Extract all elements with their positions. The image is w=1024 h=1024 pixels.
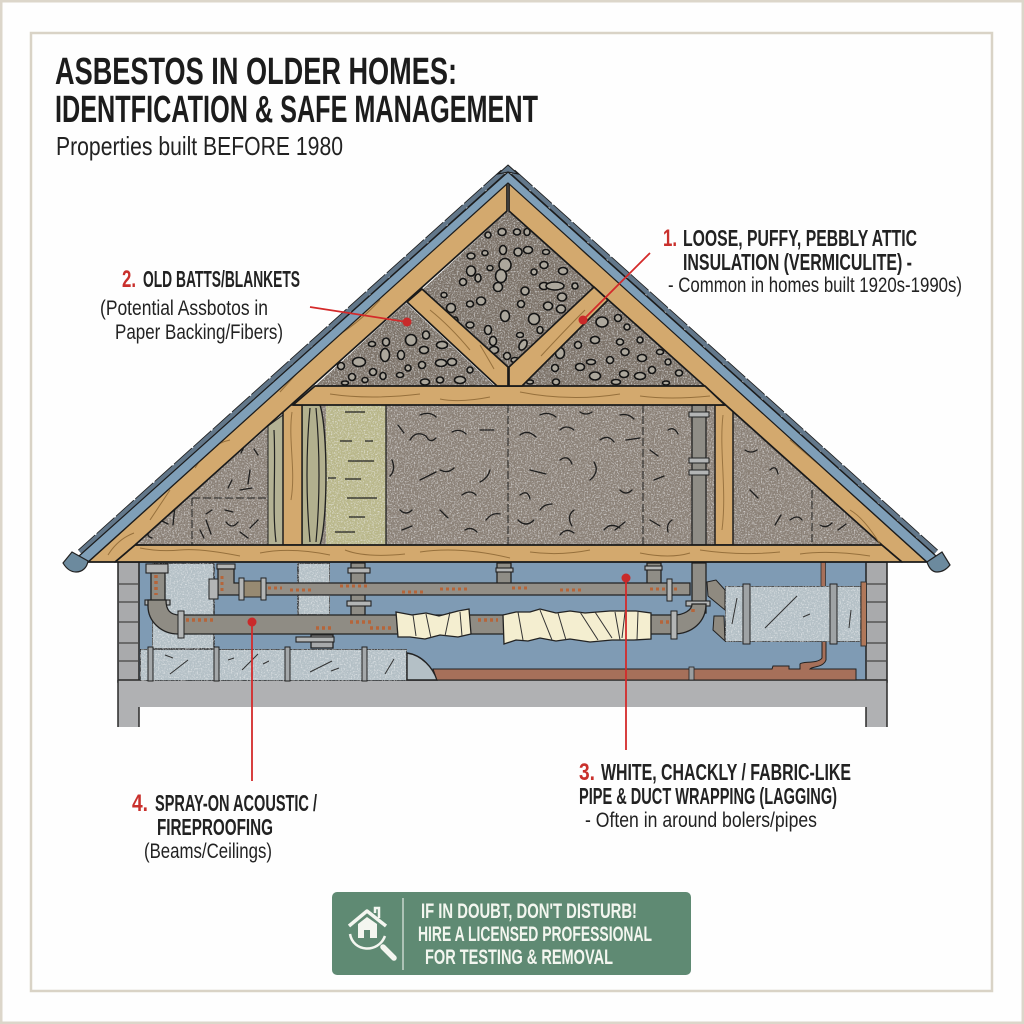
left wall [118, 562, 139, 682]
callout text 4: FIREPROOFING [157, 814, 273, 840]
right duct [707, 580, 866, 646]
callout text 4: 4. [132, 790, 148, 817]
callout leader 2 [310, 307, 412, 326]
truss frame [88, 183, 927, 562]
collar tie [293, 386, 725, 405]
callout text 2: OLD BATTS/BLANKETS [143, 266, 300, 292]
right brace [509, 287, 608, 386]
title [55, 51, 538, 131]
banner text: FOR TESTING & REMOVAL [425, 946, 613, 969]
wood grain [108, 225, 880, 558]
floor slab [118, 680, 887, 727]
attic insulation field [135, 405, 882, 545]
callout text 2: (Potential Assbotos in [100, 297, 268, 320]
callout text 1: LOOSE, PUFFY, PEBBLY ATTIC [683, 225, 917, 251]
right rafter [509, 183, 927, 562]
banner text: IF IN DOUBT, DON'T DISTURB! [421, 900, 637, 923]
callout text 3: WHITE, CHACKLY / FABRIC-LIKE [601, 759, 851, 785]
callout text 2 [100, 266, 300, 344]
lower rusty pipe with elbows [148, 575, 706, 639]
right wall [866, 562, 887, 682]
vertical pipe in attic [689, 405, 709, 545]
callout text 3: PIPE & DUCT WRAPPING (LAGGING) [579, 783, 837, 809]
callout text 3 [579, 759, 851, 832]
left rafter [88, 183, 507, 562]
title: IDENTFICATION & SAFE MANAGEMENT [55, 89, 538, 131]
callout text 3: 3. [579, 759, 595, 786]
roof shingles [79, 165, 936, 562]
warning banner [332, 892, 691, 975]
crawl space background [138, 562, 867, 682]
pipe lagging wrap B [503, 609, 651, 644]
callout text 3: - Often in around bolers/pipes [585, 809, 817, 832]
callout text 4: (Beams/Ceilings) [144, 840, 272, 863]
banner text [418, 900, 652, 969]
copper pipe along floor [433, 562, 856, 680]
vertical studs [283, 405, 733, 545]
left brace [407, 289, 508, 386]
vermiculite pebbles [338, 228, 682, 385]
banner text: HIRE A LICENSED PROFESSIONAL [418, 923, 652, 946]
sprayed block columns [152, 563, 330, 649]
callout text 1: 1. [663, 225, 677, 252]
callout leader 4 [248, 618, 256, 781]
vertical pipe stubs [151, 563, 706, 648]
callout text 4: SPRAY-ON ACOUSTIC / [155, 790, 317, 816]
lower duct run [140, 647, 437, 681]
subtitle: Properties built BEFORE 1980 [56, 131, 343, 161]
callout leader 1 [578, 253, 650, 324]
vermiculite fill: centre diamond [423, 211, 593, 367]
icon: house under magnifying glass [349, 908, 394, 958]
vermiculite fill: left triangle [315, 303, 495, 386]
house cross-section diagram [63, 165, 950, 727]
callout text 2: 2. [122, 266, 136, 293]
callout text 1: INSULATION (VERMICULITE) - [683, 249, 912, 275]
left gutter [63, 552, 88, 572]
callout text 2: Paper Backing/Fibers) [115, 321, 283, 344]
title: ASBESTOS IN OLDER HOMES: [55, 51, 457, 93]
callout leader 3 [622, 574, 630, 750]
callout text 4 [132, 790, 317, 863]
upper rusty pipe [209, 569, 690, 601]
insulation batt (old blanket) [268, 405, 386, 545]
bottom tie beam [115, 545, 902, 562]
pipe flanges [145, 564, 710, 642]
pipe lagging wrap A [396, 609, 471, 639]
right gutter [927, 552, 950, 572]
callout text 1 [663, 225, 962, 297]
vermiculite fill: right triangle [523, 300, 703, 386]
